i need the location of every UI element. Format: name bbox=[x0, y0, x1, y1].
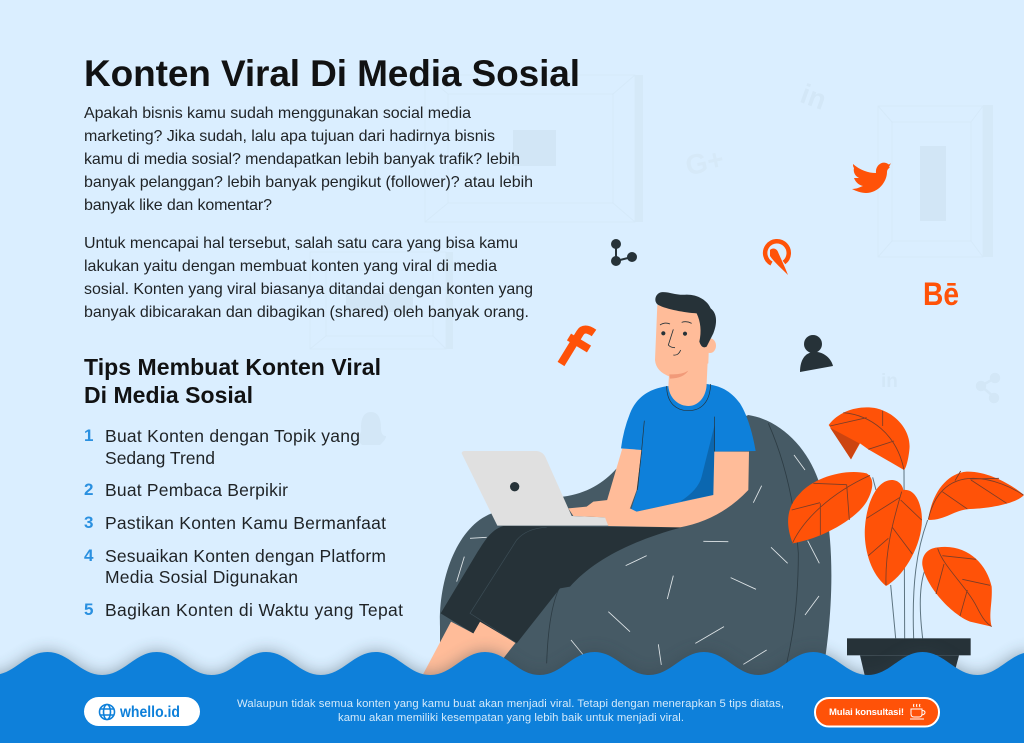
icon: twitter bbox=[852, 163, 891, 193]
background frames and faint social icons bbox=[310, 75, 999, 445]
chin shadow bbox=[669, 371, 688, 379]
collar bbox=[667, 384, 711, 411]
tip 2: Buat Pembaca Berpikir bbox=[105, 480, 288, 500]
icon: behance: Bē bbox=[923, 276, 959, 312]
intro paragraph: marketing? Jika sudah, lalu apa tujuan dari hadirnya bisnis bbox=[84, 128, 495, 145]
second paragraph: Untuk mencapai hal tersebut, salah satu cara yang bisa kamu bbox=[84, 235, 518, 252]
tips heading: Di Media Sosial bbox=[84, 382, 253, 408]
feet bbox=[420, 622, 516, 680]
leaf right upper bbox=[928, 471, 1024, 520]
intro paragraph bbox=[84, 105, 533, 214]
tip 1 bbox=[84, 426, 360, 468]
pants bbox=[441, 526, 682, 643]
icon: share dark bbox=[612, 240, 636, 265]
footer message: Walaupun tidak semua konten yang kamu buat akan menjadi viral. Tetapi dengan menerapkan 5 tips diatas, bbox=[237, 698, 784, 710]
footer message: kamu akan memiliki kesempatan yang lebih baik untuk menjadi viral. bbox=[338, 712, 684, 724]
tips heading: Tips Membuat Konten Viral bbox=[84, 354, 381, 380]
shirt shading bbox=[680, 423, 715, 502]
tip 3: Pastikan Konten Kamu Bermanfaat bbox=[105, 513, 386, 533]
intro paragraph: banyak like dan komentar? bbox=[84, 197, 272, 214]
faint frame: right bbox=[878, 105, 993, 257]
second paragraph: banyak dibicarakan dan dibagikan (shared) oleh banyak orang. bbox=[84, 304, 529, 321]
neck bbox=[668, 347, 708, 406]
tip 4: Media Sosial Digunakan bbox=[105, 567, 298, 587]
tip 5: Bagikan Konten di Waktu yang Tepat bbox=[105, 600, 403, 620]
second paragraph bbox=[84, 235, 533, 321]
logo pill: whello.id bbox=[119, 704, 180, 721]
faint icon: linkedin: in bbox=[881, 371, 898, 392]
facial features bbox=[660, 322, 692, 355]
faint icon: share bbox=[977, 374, 999, 402]
intro paragraph: kamu di media sosial? mendapatkan lebih banyak trafik? lebih bbox=[84, 151, 520, 168]
icon: pinterest bbox=[765, 241, 789, 275]
hair bbox=[655, 292, 716, 347]
cta button: Mulai konsultasi! bbox=[829, 707, 904, 718]
faint icon: linkedin tilted: in bbox=[797, 78, 831, 116]
bag seams bbox=[547, 423, 798, 663]
icon: globe bbox=[100, 704, 114, 720]
leaf centre bbox=[865, 480, 922, 586]
faint icon: snapchat ghost bbox=[356, 412, 386, 445]
illustration: man on bean bag bbox=[420, 292, 831, 680]
tip 4: 4 bbox=[84, 546, 94, 565]
footer wave bbox=[0, 652, 1024, 743]
tips heading bbox=[84, 354, 381, 408]
pot bbox=[847, 638, 971, 677]
bag stitches bbox=[457, 455, 819, 665]
stems bbox=[873, 470, 928, 638]
bean bag bbox=[440, 415, 831, 680]
shirt seams bbox=[637, 417, 715, 490]
leaf left bbox=[788, 472, 872, 543]
title: Konten Viral Di Media Sosial bbox=[84, 53, 580, 94]
front arm and hand bbox=[568, 452, 749, 527]
tip 5: 5 bbox=[84, 600, 93, 619]
faint icon: google plus: G+ bbox=[683, 143, 726, 181]
faint frame: lower left bbox=[310, 252, 453, 349]
logo pill bbox=[84, 697, 200, 726]
tip 4: Sesuaikan Konten dengan Platform bbox=[105, 546, 386, 566]
tip 1: 1 bbox=[84, 426, 93, 445]
intro paragraph: Apakah bisnis kamu sudah menggunakan social media bbox=[84, 105, 471, 122]
second paragraph: lakukan yaitu dengan membuat konten yang viral di media bbox=[84, 258, 497, 275]
tip 4 bbox=[84, 546, 386, 587]
tips list bbox=[84, 426, 403, 620]
footer message bbox=[237, 698, 784, 724]
icon: person bbox=[800, 335, 833, 372]
icon: facebook bbox=[561, 330, 594, 364]
ear bbox=[704, 338, 716, 353]
leaf right lower bbox=[922, 547, 992, 627]
floating social icons bbox=[561, 163, 959, 372]
leaf top bbox=[829, 407, 910, 470]
pants crease bbox=[470, 527, 547, 643]
tip 3: 3 bbox=[84, 513, 93, 532]
tip 2: 2 bbox=[84, 480, 93, 499]
faint frame: top centre bbox=[425, 75, 643, 222]
wave shadow bbox=[0, 643, 1024, 675]
tip 1: Buat Konten dengan Topik yang bbox=[105, 426, 360, 446]
intro paragraph: banyak pelanggan? lebih banyak pengikut (follower)? atau lebih bbox=[84, 174, 533, 191]
tip 1: Sedang Trend bbox=[105, 448, 215, 468]
laptop bbox=[462, 451, 608, 526]
cta button bbox=[815, 698, 939, 726]
illustration: potted plant bbox=[788, 407, 1024, 677]
face bbox=[655, 305, 710, 377]
second paragraph: sosial. Konten yang viral biasanya ditandai dengan konten yang bbox=[84, 281, 533, 298]
back arm bbox=[607, 448, 642, 508]
icon: coffee cup bbox=[910, 704, 925, 719]
shirt bbox=[621, 384, 756, 512]
